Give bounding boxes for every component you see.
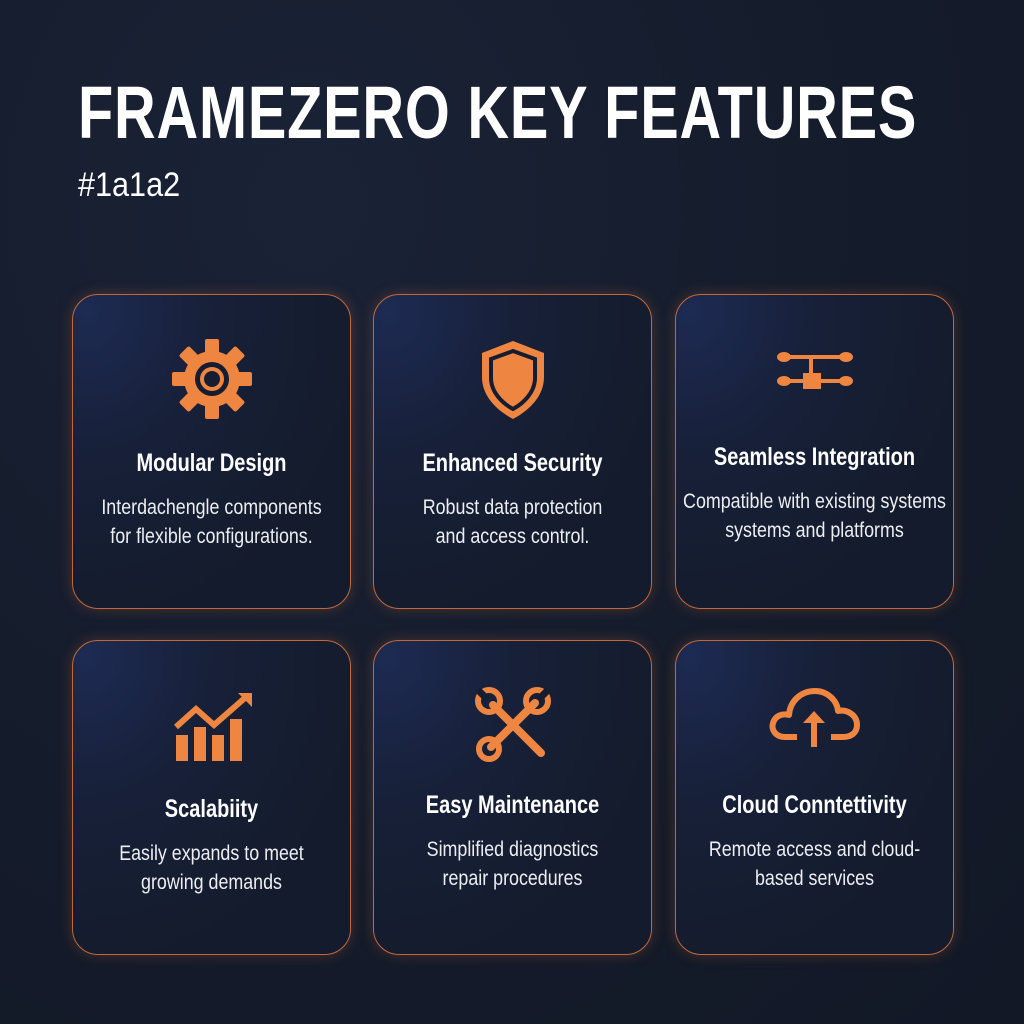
heading: Enhanced Security bbox=[422, 449, 603, 477]
text: Compatible with existing systems bbox=[683, 490, 946, 513]
icon: cloud upload bbox=[770, 688, 860, 747]
text: systems and platforms bbox=[725, 519, 904, 542]
panel: enhanced security bbox=[373, 294, 652, 609]
icon: tools bbox=[475, 687, 551, 762]
text bbox=[427, 838, 598, 890]
panel: modular design bbox=[72, 294, 351, 609]
panel: scalability bbox=[72, 640, 351, 955]
title: FRAMEZERO KEY FEATURES bbox=[78, 71, 917, 154]
text bbox=[119, 842, 304, 894]
subtitle: #1a1a2 bbox=[78, 166, 180, 204]
heading: Scalabiity bbox=[165, 795, 258, 823]
panel: seamless integration bbox=[675, 294, 954, 609]
text: repair procedures bbox=[443, 867, 582, 890]
text: Easily expands to meet bbox=[119, 842, 304, 865]
heading: Easy Maintenance bbox=[426, 791, 599, 819]
text: based services bbox=[755, 867, 874, 890]
heading: Modular Design bbox=[136, 449, 286, 477]
heading: Cloud Conntettivity bbox=[722, 791, 907, 819]
text bbox=[101, 496, 322, 548]
text: for flexible configurations. bbox=[110, 525, 313, 548]
text: Robust data protection bbox=[423, 496, 602, 519]
text bbox=[709, 838, 920, 890]
text: Interdachengle components bbox=[101, 496, 322, 519]
icon: network bbox=[777, 352, 853, 389]
text bbox=[683, 490, 946, 542]
text: Remote access and cloud- bbox=[709, 838, 920, 861]
text: Simplified diagnostics bbox=[427, 838, 598, 861]
icon: growth chart bbox=[174, 693, 252, 761]
text bbox=[423, 496, 602, 548]
icon: shield bbox=[482, 341, 544, 419]
text: growing demands bbox=[141, 871, 282, 894]
heading: Seamless Integration bbox=[714, 443, 915, 471]
panel: cloud connectivity bbox=[675, 640, 954, 955]
panel: easy maintenance bbox=[373, 640, 652, 955]
icon: gear bbox=[172, 339, 252, 419]
text: and access control. bbox=[436, 525, 589, 548]
